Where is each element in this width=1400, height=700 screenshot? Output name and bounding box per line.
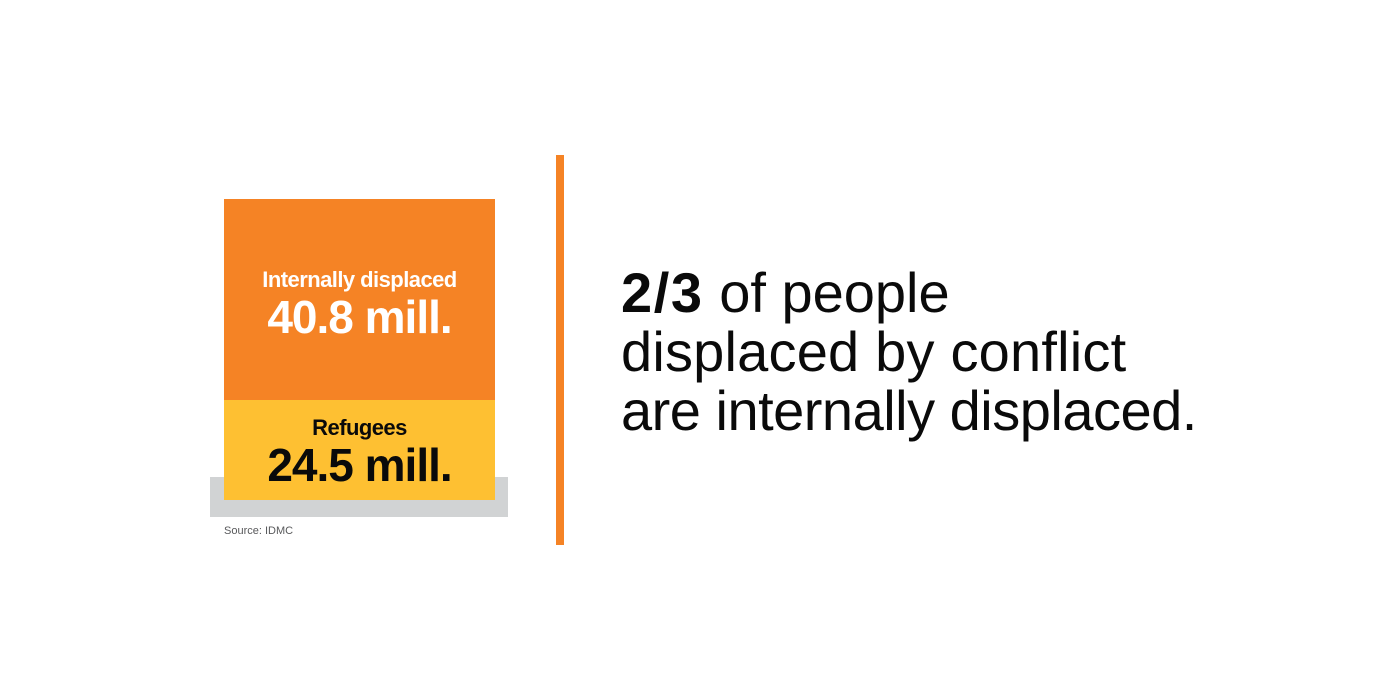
source note: Source: IDMC <box>224 525 293 537</box>
headline line 2: displaced by conflict <box>621 320 1126 383</box>
panel: internally displaced block <box>224 199 495 400</box>
grey base platform <box>210 477 508 517</box>
label: internally displaced: Internally displaced <box>262 267 457 292</box>
panel: refugees block <box>224 400 495 500</box>
label: refugees: Refugees <box>312 415 407 440</box>
headline statement <box>621 261 1197 442</box>
headline line 1: 2/3 of people <box>621 261 950 324</box>
vertical divider <box>556 155 564 545</box>
headline line 3: are internally displaced. <box>621 379 1197 442</box>
value: 40.8 million: 40.8 mill. <box>267 291 452 343</box>
value: 24.5 million: 24.5 mill. <box>267 439 452 491</box>
panel: stacked displacement bar <box>224 199 495 500</box>
